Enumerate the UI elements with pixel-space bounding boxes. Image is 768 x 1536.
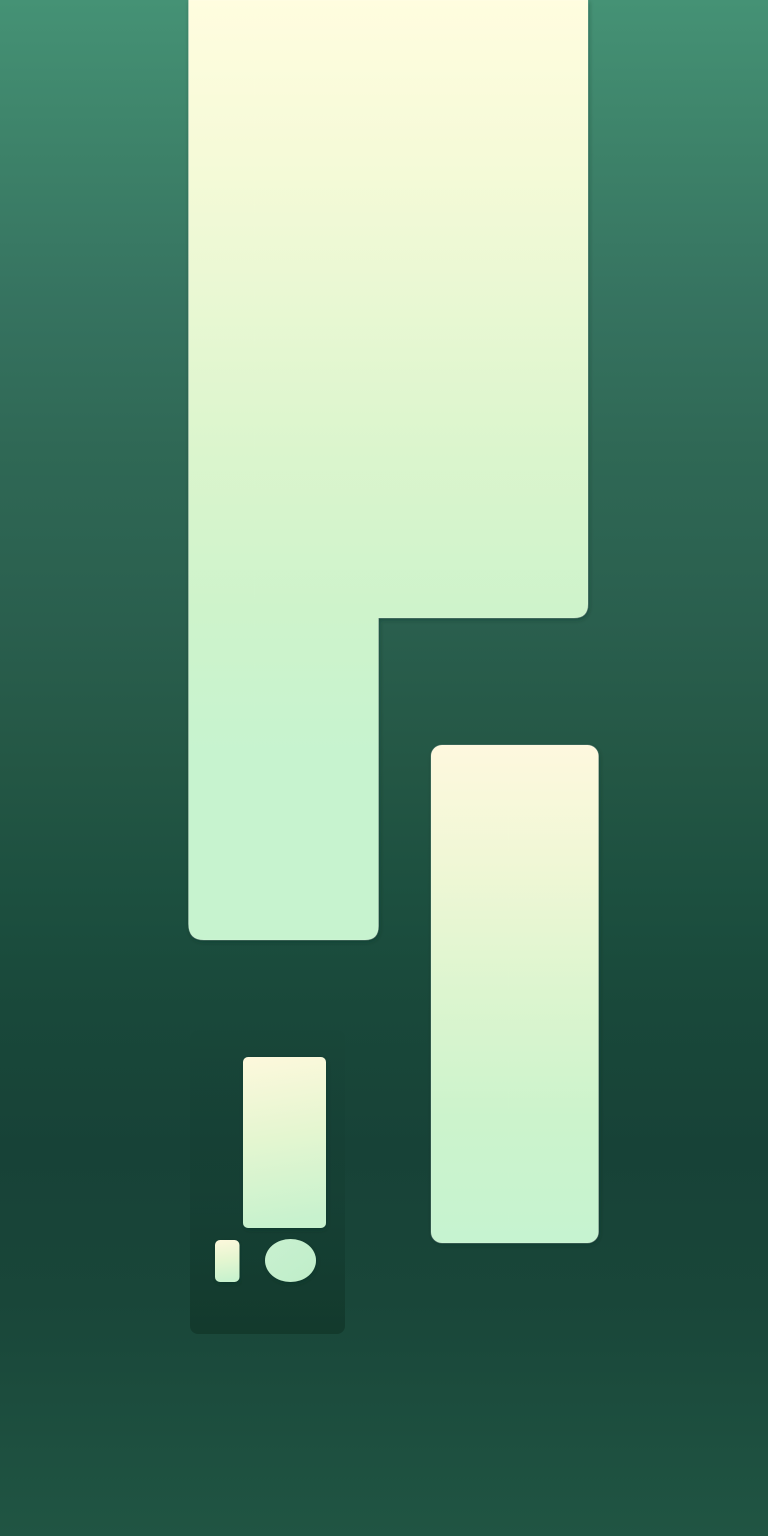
icon: oval xyxy=(265,1239,316,1282)
panel: large stepped card xyxy=(188,0,588,940)
panel: right tall card xyxy=(431,745,598,1243)
panel: small inner card xyxy=(243,1057,326,1228)
panel: dark lower container xyxy=(190,1030,345,1334)
icon: small rectangle xyxy=(215,1240,240,1282)
